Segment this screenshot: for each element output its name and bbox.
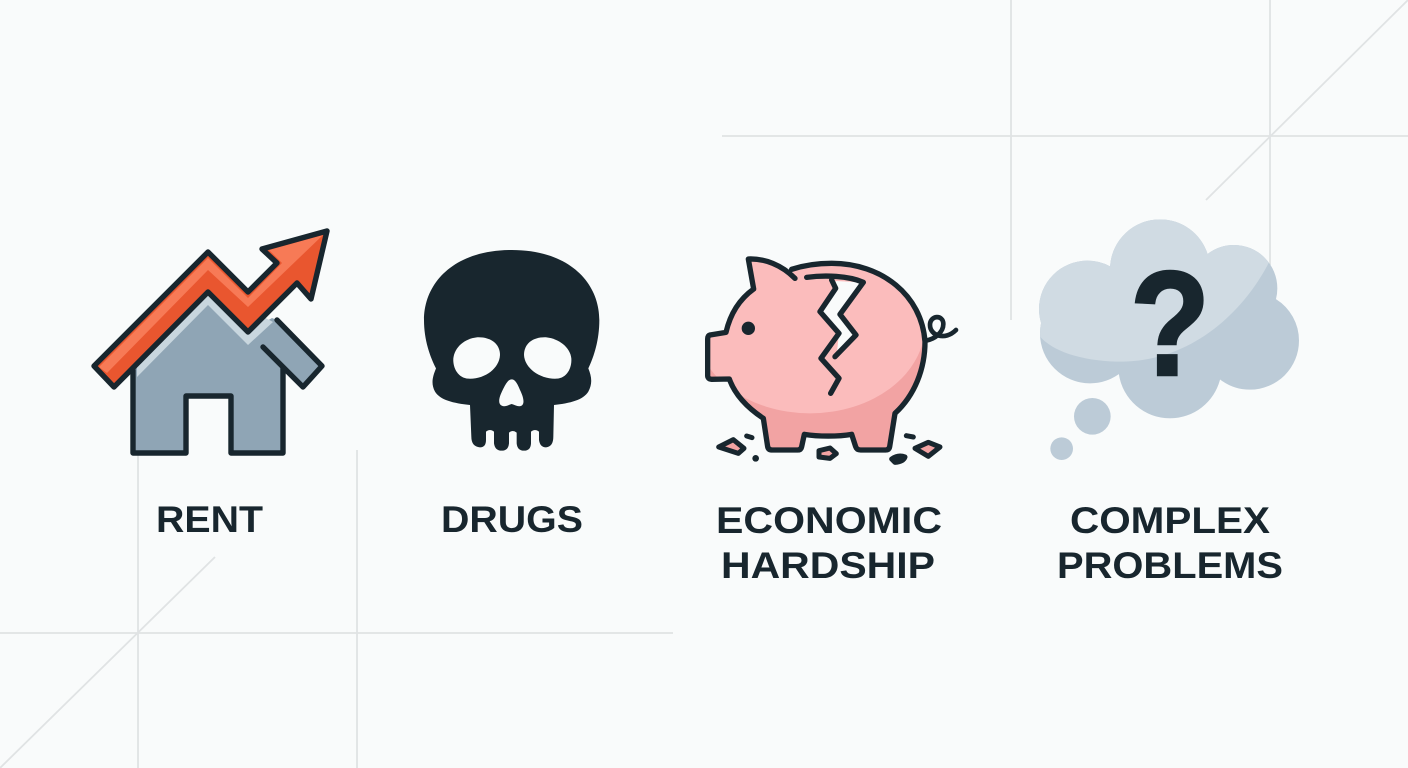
label: economic hardship: HARDSHIP [721, 545, 935, 586]
nose [499, 379, 523, 406]
question mark: ? [1130, 240, 1210, 407]
crack opening [820, 281, 862, 355]
label: complex problems: COMPLEX [1070, 500, 1270, 541]
label: complex problems [1057, 500, 1283, 586]
label: complex problems: PROBLEMS [1057, 545, 1283, 586]
pig eye [742, 322, 755, 335]
icon: house with rising arrow [94, 231, 327, 453]
thought bubbles [1050, 398, 1111, 460]
cloud [1039, 220, 1299, 460]
pig tail [926, 317, 956, 341]
skull silhouette [424, 250, 599, 451]
house body [133, 292, 322, 453]
icon: broken piggy bank [705, 256, 958, 465]
label: rent: RENT [156, 499, 263, 540]
icon: thought cloud with question mark [1039, 220, 1299, 460]
roof highlight [137, 292, 273, 377]
icon: skull [424, 250, 599, 451]
shard dot [752, 455, 759, 462]
rising arrow [94, 231, 327, 387]
pig body [705, 256, 928, 453]
coin slot and crack lines [807, 276, 863, 393]
left eye [453, 337, 500, 379]
shards [719, 436, 940, 462]
label: drugs: DRUGS [441, 499, 583, 540]
label: economic hardship [716, 500, 942, 586]
house outline [133, 320, 322, 453]
right eye [524, 337, 571, 379]
label: economic hardship: ECONOMIC [716, 500, 942, 541]
